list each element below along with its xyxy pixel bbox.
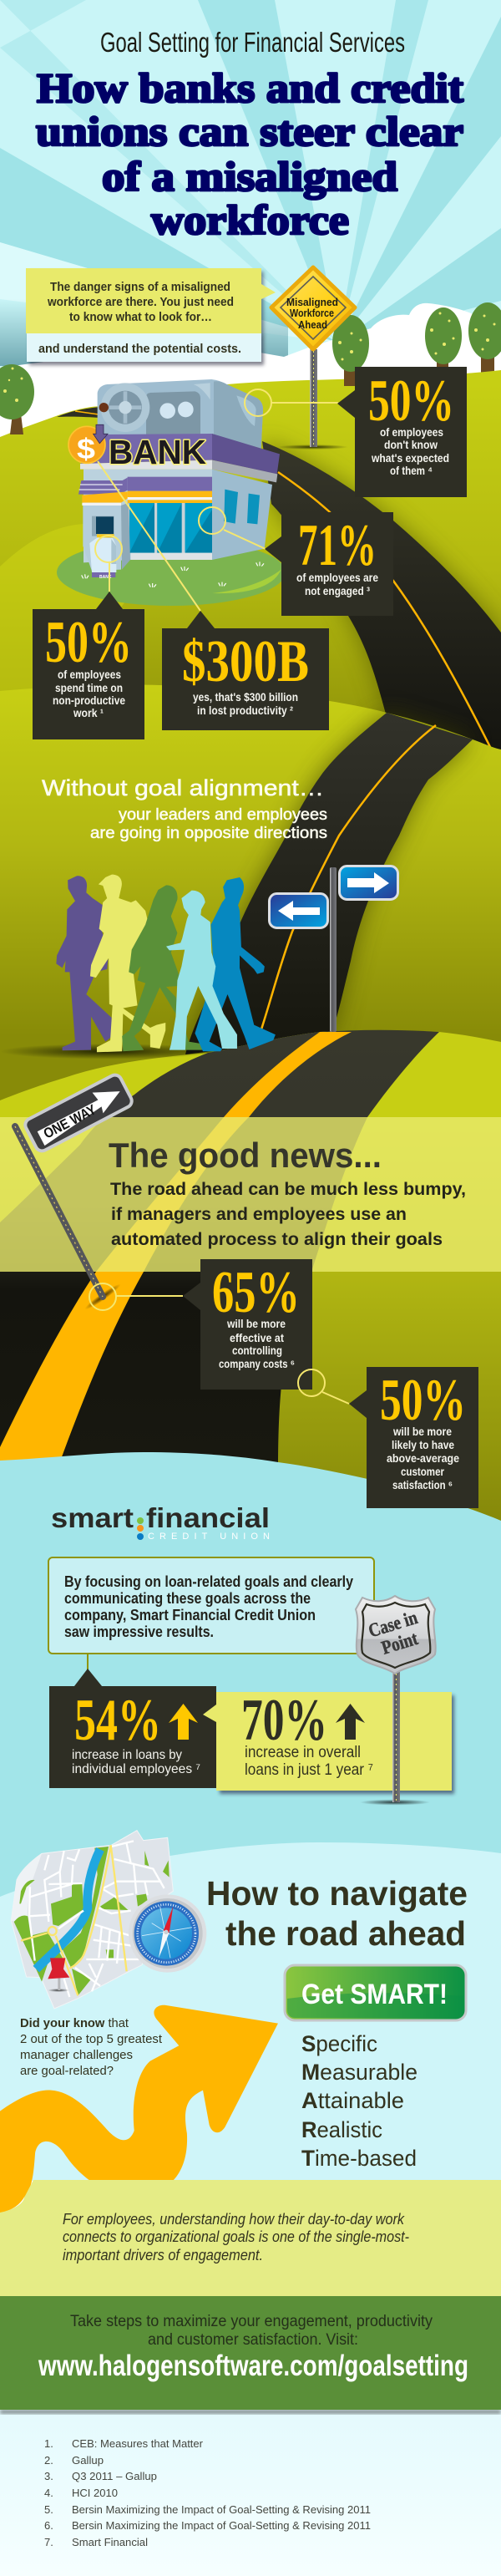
sign: one way [15,1073,134,1312]
stat: $300B lost productivity: in lost productivity ² [197,704,293,717]
stat: 65% effective at controlling costs: 65% [212,1260,300,1325]
road shadow: upper road [262,441,501,756]
stat: 54% increase in loans by individual employees [49,1669,216,1788]
stat: 50% don't know what's expected [245,367,467,497]
band: the good news: The road ahead can be much less bumpy, [110,1180,466,1199]
road: middle section [185,713,473,1054]
list: references [44,2437,371,2548]
stat: 50% don't know what's expected: 50% [368,368,454,434]
panel: call to action: Take steps to maximize your engagement, productivity [70,2313,433,2330]
list: references: 3. [44,2470,53,2482]
heading: how to navigate the road ahead: How to navigate [206,1874,468,1913]
stat: 50% non-productive work: work ¹ [73,706,104,719]
heading: main title: How banks and credit [37,64,463,111]
list: references: 4. [44,2487,53,2499]
text: did you know fact: are goal-related? [20,2064,114,2078]
list: smart acronym: Attainable [301,2088,404,2113]
signpost: opposite direction arrows [269,866,397,1032]
sign: misaligned workforce ahead: Misaligned [286,296,338,308]
list: smart acronym: Realistic [301,2117,382,2142]
callout: intro text boxes: and understand the potential costs. [38,342,241,356]
band: the good news: automated process to align their goals [111,1230,443,1249]
stat: $300B lost productivity: $300B [182,629,309,694]
stat: 50% don't know what's expected: of employees [380,425,443,439]
stat: 71% not engaged: of employees are [296,571,378,584]
stat: 50% above-average customer satisfaction: customer [401,1465,444,1478]
background: middle hill [0,684,501,1111]
stat: 71% not engaged: not engaged ³ [305,584,370,597]
background: pale blue lower section [0,1452,501,1922]
list: references: Gallup [72,2454,104,2467]
stat: 65% effective at controlling costs: effective at [230,1331,284,1344]
callout: intro text boxes: workforce are there. You just need [47,295,234,309]
sign: misaligned workforce ahead: Workforce [290,307,334,319]
text: did you know fact: manager challenges [20,2048,133,2062]
background: footer [0,2410,501,2576]
stat: 50% above-average customer satisfaction: likely to have [392,1438,454,1451]
heading: main title: of a misaligned [102,153,397,200]
band: engagement statement: For employees, understanding how their day-to-day work [63,2211,405,2228]
road: lower section with wide stripe [0,1030,439,1471]
text: did you know fact: Did your know that [20,2016,129,2030]
heading: main title [36,64,463,243]
stat: 50% don't know what's expected: of them ⁴ [390,464,433,477]
band: engagement statement: important drivers of engagement. [63,2247,263,2264]
bank illustration: BANK [109,433,206,471]
stat: 54% increase in loans by individual employees: 54% [74,1688,161,1753]
stat: 54% increase in loans by individual employees: increase in loans by [72,1748,182,1762]
list: smart acronym: Time-based [301,2146,417,2171]
stat: 70% increase in overall loans [216,1688,454,1794]
background: left hill fold [0,508,125,694]
panel: call to action: and customer satisfaction. Visit: [148,2331,358,2349]
bank illustration: BANK [99,575,112,580]
logo: smart financial credit union: financial [146,1502,270,1533]
callout: intro text boxes: The danger signs of a misaligned [50,280,230,294]
heading: without goal alignment: are going in opposite directions [90,825,327,842]
sign: one way: ONE WAY [41,1101,99,1142]
callout: case study text box: communicating these goals across the [64,1590,311,1607]
callout: intro text boxes [26,268,276,365]
heading: how to navigate the road ahead [206,1874,468,1953]
stat: 50% above-average customer satisfaction: satisfaction ⁶ [392,1478,453,1491]
sign: case in point shield: Point [379,1628,421,1659]
heading: main title: unions can steer clear [36,108,463,155]
stat: 50% above-average customer satisfaction [298,1367,478,1508]
button: get smart: Get SMART! [301,1979,448,2010]
list: references: 2. [44,2454,53,2467]
stat: 50% non-productive work: 50% [45,610,132,675]
list: references: Q3 2011 – Gallup [72,2470,157,2482]
stat: 54% increase in loans by individual employees: individual employees ⁷ [72,1762,200,1776]
callout: intro text boxes: to know what to look for… [69,310,212,324]
stat: 65% effective at controlling costs: company costs ⁶ [219,1357,295,1370]
band: the good news [0,1117,501,1272]
list: smart acronym: Measurable [301,2060,418,2085]
band: engagement statement: connects to organizational goals is one of the single-most- [63,2228,409,2245]
road: stub behind the bank [57,405,134,428]
callout: case study text box [48,1557,374,1671]
stat: $300B lost productivity: yes, that's $300 billion [193,690,298,704]
band: the good news: if managers and employees use an [111,1205,407,1224]
sign: case in point shield: Case in [366,1607,420,1641]
list: references: 5. [44,2503,53,2516]
background: upper green hill [0,370,501,752]
list: references: 6. [44,2519,53,2532]
stat: 70% increase in overall loans: loans in just 1 year ⁷ [245,1761,373,1779]
list: smart acronym [301,2031,418,2171]
list: references: CEB: Measures that Matter [72,2437,204,2450]
list: smart acronym: Specific [301,2031,377,2056]
stat: 50% don't know what's expected: what's expected [371,451,449,465]
stat: 50% non-productive work: spend time on [55,681,123,694]
sign: case in point shield [356,1596,436,1805]
stat: $300B lost productivity [98,461,329,730]
stat: 70% increase in overall loans: 70% [241,1688,327,1753]
logo: smart financial credit union [51,1502,270,1542]
background: lightest blue section [0,1842,501,2181]
stat: 70% increase in overall loans: increase in overall [245,1744,361,1761]
panel: call to action [0,2296,501,2414]
band: engagement statement [0,2180,501,2296]
text: did you know fact [20,2016,163,2078]
arrow: winding orange road arrow [0,2005,278,2213]
sign: misaligned workforce ahead [271,267,355,450]
stat: 65% effective at controlling costs: controlling [232,1344,282,1357]
stat: 65% effective at controlling costs: will be more [226,1317,286,1330]
tree: beside warning sign [332,315,369,386]
callout: case study text box: saw impressive results. [64,1623,214,1640]
heading: without goal alignment: your leaders and employees [119,806,327,824]
sign: misaligned workforce ahead: Ahead [298,318,327,331]
stat: 50% non-productive work [33,536,144,739]
list: references: 1. [44,2437,53,2450]
stat: 65% effective at controlling costs [89,1259,312,1390]
list: references: Smart Financial [72,2536,148,2548]
list: references: 7. [44,2536,53,2548]
list: references: Bersin Maximizing the Impact of Goal-Setting & Revising 2011 [72,2519,371,2532]
road: upper winding section [262,441,501,760]
background: white clouds [0,303,501,443]
logo: smart financial credit union: smart [51,1502,134,1533]
stat: 50% above-average customer satisfaction: will be more [392,1425,452,1438]
bank illustration: $ [77,434,95,465]
heading: how to navigate the road ahead: the road ahead [225,1914,466,1953]
list: references: HCI 2010 [72,2487,118,2499]
button: get smart [285,1965,466,2020]
stat: 50% above-average customer satisfaction: 50% [380,1368,466,1433]
list: references: Bersin Maximizing the Impact of Goal-Setting & Revising 2011 [72,2503,371,2516]
tree: far right [468,302,501,374]
logo: smart financial credit union: CREDIT UNION [148,1532,270,1542]
stat: 50% non-productive work: non-productive [53,694,125,707]
heading: without goal alignment [42,775,327,842]
heading: without goal alignment: Without goal alignment… [42,775,324,800]
illustration: walking silhouettes [0,875,276,1059]
heading: main title: workforce [151,196,349,243]
stat: 50% above-average customer satisfaction: above-average [387,1451,459,1465]
band: the good news: The good news... [109,1136,382,1175]
callout: case study text box: company, Smart Financial Credit Union [64,1607,316,1623]
bank illustration [57,379,286,606]
stat: 71% not engaged: 71% [298,513,377,578]
text: did you know fact: 2 out of the top 5 greatest [20,2032,163,2046]
road shadow: middle road [185,713,473,1054]
tree: centre right [425,307,462,376]
illustration: map with compass and pin [11,1831,206,2009]
tree: far left [0,364,34,434]
stat: 50% don't know what's expected: don't know [384,438,438,451]
stat: 71% not engaged [199,507,393,616]
callout: case study text box: By focusing on loan-related goals and clearly [64,1573,353,1590]
background: sky with sun rays [0,0,501,468]
background: lower hill [0,1030,501,1529]
stat: 50% non-productive work: of employees [58,668,121,681]
